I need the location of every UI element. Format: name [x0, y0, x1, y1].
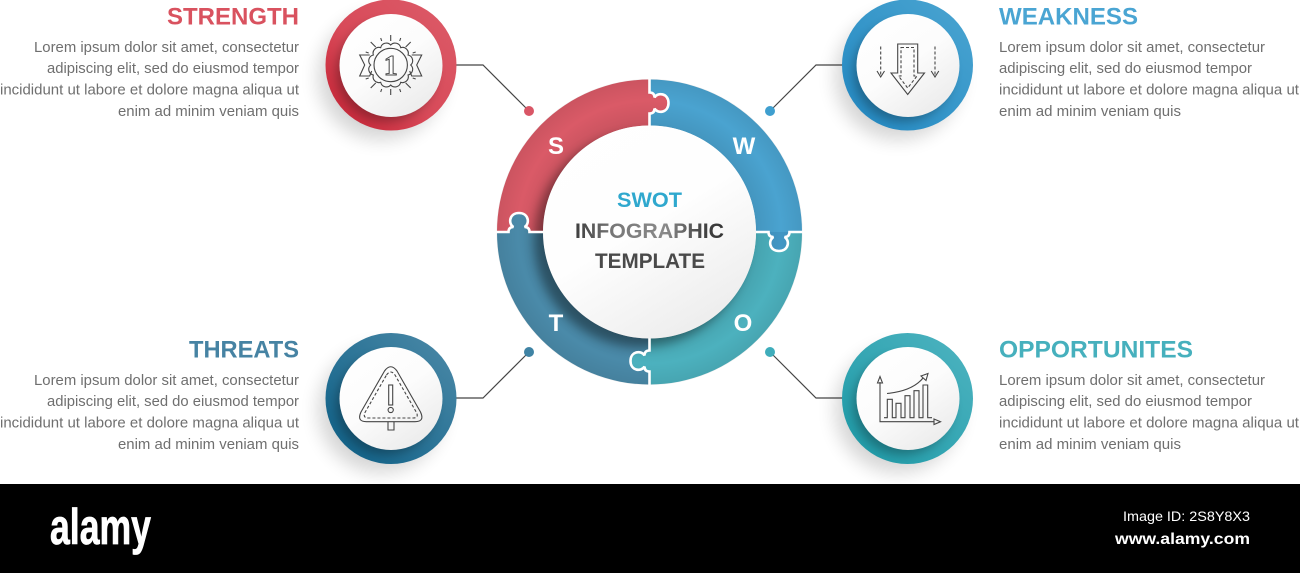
site url: www.alamy.com	[1114, 531, 1250, 548]
letter T: T	[549, 310, 564, 337]
text block: threats: adipiscing elit, sed do eiusmod tempor	[47, 394, 299, 410]
text block: opportunities: incididunt ut labore et dolore magna aliqua ut	[999, 416, 1299, 432]
text block: weakness: incididunt ut labore et dolore magna aliqua ut	[999, 82, 1299, 98]
text block: opportunities: adipiscing elit, sed do eiusmod tempor	[999, 394, 1252, 410]
text block: strength: Lorem ipsum dolor sit amet, consectetur	[34, 40, 299, 56]
text block: strength: incididunt ut labore et dolore magna aliqua ut	[0, 82, 299, 98]
connector: weakness	[765, 65, 843, 116]
text block: strength	[0, 4, 299, 120]
badge: weakness	[835, 0, 973, 140]
connector: threats	[456, 347, 534, 398]
text block: threats	[0, 336, 299, 453]
text block: weakness: enim ad minim veniam quis	[999, 104, 1181, 120]
text block: opportunities: OPPORTUNITES	[999, 336, 1193, 364]
icon: medal: 1	[384, 51, 398, 82]
text block: threats: THREATS	[189, 336, 299, 364]
footer watermark bar	[0, 484, 1300, 573]
text block: weakness	[999, 4, 1299, 120]
icon: warning sign	[360, 367, 422, 430]
center title: INFOGRAPHIC	[575, 219, 724, 243]
text block: weakness: Lorem ipsum dolor sit amet, consectetur	[999, 40, 1265, 56]
segment: W	[650, 80, 802, 232]
badge: threats	[318, 333, 456, 473]
text block: threats: incididunt ut labore et dolore magna aliqua ut	[0, 416, 299, 432]
letter S: S	[548, 133, 564, 160]
segment: O	[650, 232, 802, 384]
text block: weakness: WEAKNESS	[999, 4, 1138, 30]
center disc	[543, 126, 756, 338]
text block: weakness: adipiscing elit, sed do eiusmod tempor	[999, 61, 1252, 77]
connector: opportunities	[765, 347, 843, 398]
puzzle knobs	[508, 92, 790, 372]
badge: opportunities	[835, 333, 973, 473]
letter O: O	[734, 310, 752, 337]
text block: strength: enim ad minim veniam quis	[118, 104, 299, 120]
badge: strength	[318, 0, 456, 140]
icon: medal	[360, 35, 422, 95]
central puzzle ring	[496, 78, 803, 386]
text block: opportunities: Lorem ipsum dolor sit amet, consectetur	[999, 373, 1265, 389]
text block: strength: adipiscing elit, sed do eiusmod tempor	[47, 61, 299, 77]
center title: SWOT	[617, 188, 682, 212]
text block: strength: STRENGTH	[167, 4, 299, 30]
text block: threats: enim ad minim veniam quis	[118, 437, 299, 453]
puzzle joints	[496, 78, 803, 386]
connector: strength	[456, 65, 534, 116]
center title: TEMPLATE	[595, 249, 705, 273]
text block: opportunities: enim ad minim veniam quis	[999, 437, 1181, 453]
icon: growth chart	[878, 374, 940, 424]
icon: down arrows	[877, 44, 939, 94]
center title	[575, 188, 724, 273]
segment: S	[497, 80, 650, 232]
text block: opportunities	[999, 336, 1299, 453]
alamy logo: alamy	[50, 499, 151, 555]
letter W: W	[733, 133, 756, 160]
text block: threats: Lorem ipsum dolor sit amet, consectetur	[34, 373, 299, 389]
image id: Image ID: 2S8Y8X3	[1123, 508, 1250, 524]
segment: T	[497, 232, 650, 384]
